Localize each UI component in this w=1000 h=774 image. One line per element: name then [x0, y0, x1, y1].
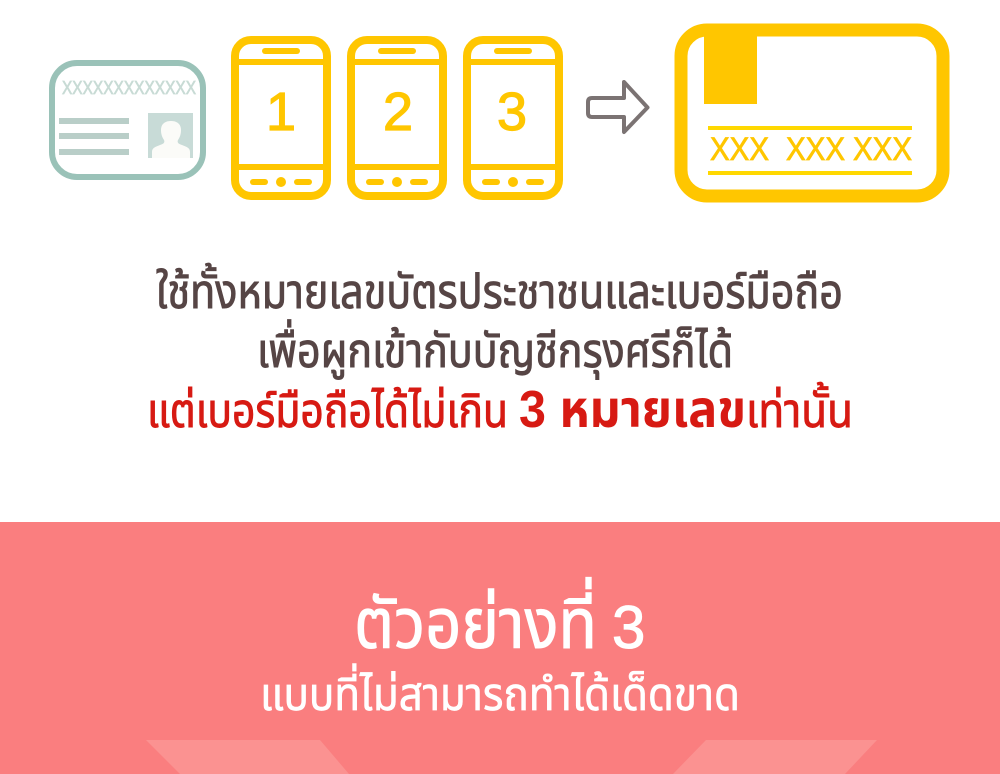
subheading: แบบที่ไม่สามารถทำได้เด็ดขาด: [260, 663, 740, 720]
icon: bank book: [681, 30, 943, 196]
number 3: 3: [497, 82, 527, 142]
ribbon left: [146, 740, 349, 774]
icon: ID card: [52, 63, 203, 177]
heading: ตัวอย่างที่: [354, 577, 597, 663]
bank book cover tab: [704, 35, 757, 104]
text block: main message: [147, 263, 853, 439]
panel: example 3: [0, 522, 1000, 774]
account number: XXX: [786, 131, 845, 167]
account number: XXX: [853, 131, 912, 167]
line 2: เพื่อผูกเข้ากับบัญชีกรุงศรีก็ได้: [257, 319, 733, 379]
number 2: 2: [383, 82, 413, 142]
ID card text lines: [59, 118, 129, 155]
account number: [710, 131, 912, 167]
number 1: 1: [266, 82, 296, 142]
ID card number: XXXXXXXXXXXXX: [62, 78, 196, 98]
icon: phone 2: [351, 40, 443, 196]
line 3: red emphasis: แต่เบอร์มือถือได้ไม่เกิน: [147, 384, 508, 437]
heading: 3: [612, 594, 645, 661]
icon: phone 1: [235, 40, 327, 196]
line 3: red emphasis: 3 หมายเลข: [519, 381, 746, 439]
icon: phone 3: [467, 40, 559, 196]
line 3: red emphasis: [147, 381, 853, 439]
account number: XXX: [710, 131, 769, 167]
ID card photo: [148, 113, 193, 158]
arrow: [588, 82, 648, 132]
line 3: red emphasis: เท่านั้น: [746, 382, 853, 437]
account number lines: [708, 126, 912, 175]
line 1: ใช้ทั้งหมายเลขบัตรประชาชนและเบอร์มือถือ: [156, 263, 843, 318]
ribbon right: [673, 740, 877, 774]
